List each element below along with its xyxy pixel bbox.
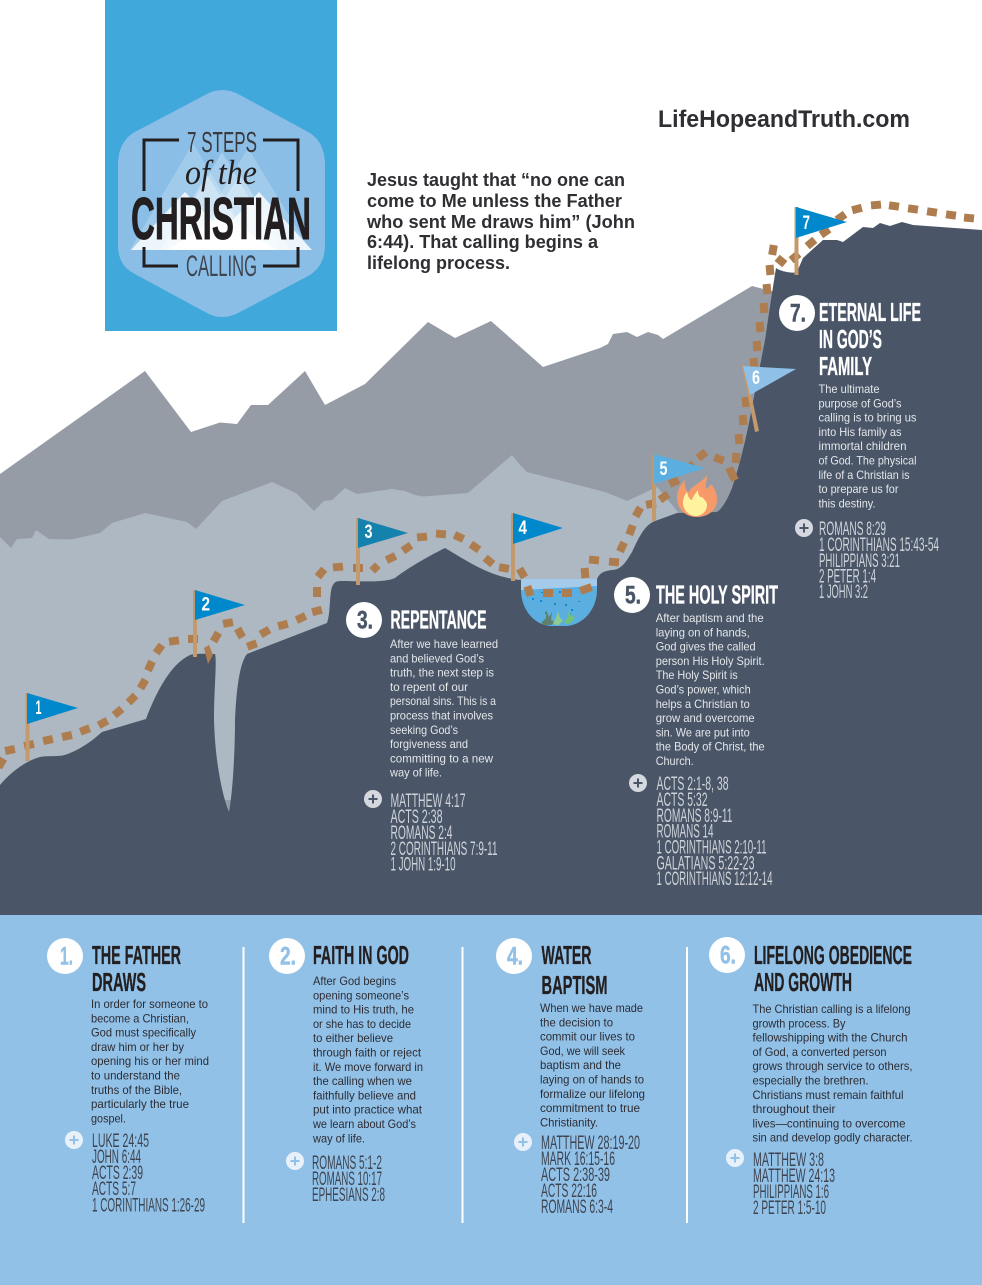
- scripture references: [541, 1133, 640, 1218]
- scripture references: ACTS 22:16: [541, 1181, 597, 1202]
- step 1: the father draws: [47, 938, 209, 1216]
- scripture references: 1 CORINTHIANS 1:26-29: [92, 1196, 205, 1216]
- scripture references: MATTHEW 4:17: [390, 791, 466, 812]
- number badge 6: 6.: [720, 942, 736, 970]
- body text: to understand the: [91, 1070, 180, 1082]
- body text: it. We move forward in: [313, 1061, 423, 1074]
- scripture references: [312, 1153, 385, 1206]
- heading: [819, 299, 921, 381]
- heading: FAITH IN GOD: [313, 942, 409, 970]
- body text: to either believe: [313, 1032, 393, 1045]
- step 3: repentance: [346, 602, 498, 876]
- plus icon: [795, 519, 813, 537]
- flag 4: [511, 513, 563, 581]
- intro text: [366, 169, 635, 273]
- scripture references: ACTS 2:39: [92, 1163, 143, 1184]
- flag 3: [356, 518, 408, 585]
- logo mountains: [130, 143, 312, 250]
- scripture references: MARK 16:15-16: [541, 1149, 615, 1170]
- scripture references: 2 CORINTHIANS 7:9-11: [390, 839, 498, 860]
- scripture references: ROMANS 8:9-11: [656, 806, 732, 827]
- plus icon: [514, 1133, 532, 1151]
- body text: In order for someone to: [91, 998, 208, 1011]
- body text: fellowshipping with the Church: [752, 1032, 908, 1045]
- flag 1: [26, 693, 78, 761]
- body text: opening his or her mind: [91, 1055, 209, 1068]
- body text: draw him or her by: [91, 1041, 184, 1054]
- scripture references: GALATIANS 5:22-23: [656, 854, 754, 874]
- heading: [542, 942, 608, 1000]
- step 2: faith in god: [269, 938, 423, 1206]
- flag 6: [742, 365, 796, 432]
- body text: When we have made: [540, 1002, 643, 1015]
- body text: the calling when we: [313, 1075, 412, 1088]
- body text: way of life.: [389, 767, 442, 780]
- scripture references: ROMANS 6:3-4: [541, 1197, 613, 1218]
- dotted journey path: [0, 201, 974, 769]
- heading: THE HOLY SPIRIT: [656, 582, 778, 610]
- step 7: eternal life: [779, 295, 939, 603]
- body text: immortal children: [818, 440, 906, 453]
- flag 6: 6: [752, 368, 760, 389]
- scripture references: [390, 791, 498, 876]
- scripture references: ROMANS 14: [656, 822, 714, 842]
- body text: After baptism and the: [656, 612, 764, 625]
- body text: life of a Christian is: [818, 469, 910, 482]
- body text: God’s power, which: [656, 684, 751, 696]
- heading: [92, 942, 181, 997]
- number badge 6: [709, 937, 745, 973]
- number badge 5: 5.: [625, 582, 641, 610]
- scripture references: ACTS 5:7: [92, 1179, 136, 1200]
- body text: growth process. By: [752, 1017, 846, 1030]
- logo panel: [105, 0, 337, 331]
- body text: process that involves: [390, 710, 493, 722]
- body text: particularly the true: [91, 1098, 189, 1111]
- body text: especially the brethren.: [752, 1074, 868, 1088]
- body text: [752, 1003, 912, 1145]
- body text: laying on of hands,: [656, 626, 750, 639]
- intro text: who sent Me draws him” (John: [366, 211, 635, 232]
- body text: sin. We are put into: [656, 726, 750, 739]
- step 4: water baptism: [496, 938, 645, 1218]
- body text: calling is to bring us: [818, 412, 917, 425]
- body text: to repent of our: [390, 681, 468, 694]
- body text: truth, the next step is: [390, 667, 494, 680]
- body text: God must specifically: [91, 1027, 196, 1040]
- scripture references: [753, 1150, 835, 1219]
- body text: way of life.: [312, 1132, 365, 1145]
- scripture references: PHILIPPIANS 3:21: [819, 551, 900, 572]
- step 5: the holy spirit: [614, 577, 778, 890]
- heading: BAPTISM: [542, 972, 608, 1000]
- body text: throughout their: [752, 1103, 836, 1116]
- body text: opening someone’s: [313, 989, 409, 1002]
- logo title: CALLING: [186, 250, 257, 283]
- body text: The Christian calling is a lifelong: [752, 1003, 910, 1016]
- body text: into His family as: [818, 426, 902, 439]
- logo title: 7 STEPS: [187, 127, 257, 159]
- scripture references: 1 JOHN 1:9-10: [390, 854, 456, 876]
- intro text: lifelong process.: [367, 252, 510, 273]
- body text: and believed God’s: [390, 652, 484, 665]
- scripture references: ACTS 2:38: [390, 807, 442, 828]
- flag 4: 4: [518, 518, 527, 539]
- scripture references: [819, 519, 939, 603]
- scripture references: ROMANS 5:1-2: [312, 1153, 382, 1174]
- body text: lives—continuing to overcome: [752, 1117, 906, 1130]
- flag 1: 1: [36, 698, 42, 719]
- scripture references: [92, 1131, 205, 1216]
- heading: IN GOD’S: [819, 326, 882, 354]
- scripture references: MATTHEW 28:19-20: [541, 1133, 640, 1154]
- scripture references: [656, 774, 773, 890]
- scripture references: ROMANS 8:29: [819, 519, 886, 540]
- water basin: [521, 579, 597, 626]
- scripture references: PHILIPPIANS 1:6: [753, 1182, 829, 1203]
- body text: Church.: [656, 755, 694, 768]
- body text: through faith or reject: [313, 1046, 422, 1060]
- body text: commitment to true: [540, 1102, 640, 1115]
- number badge 4: 4.: [507, 942, 523, 970]
- body text: [656, 612, 765, 768]
- intro text: come to Me unless the Father: [367, 190, 622, 211]
- bottom panel: [0, 915, 982, 1285]
- body text: grows through service to others,: [752, 1060, 912, 1073]
- scripture references: LUKE 24:45: [92, 1131, 149, 1152]
- plus icon: [629, 774, 647, 792]
- number badge 7: 7.: [790, 300, 806, 328]
- plus icon: [286, 1152, 304, 1170]
- flag 7: 7: [802, 213, 810, 234]
- body text: faithfully believe and: [313, 1089, 416, 1102]
- body text: The ultimate: [818, 383, 880, 396]
- body text: this destiny.: [818, 497, 876, 510]
- body text: the Body of Christ, the: [656, 741, 765, 754]
- website address: LifeHopeandTruth.com: [658, 106, 910, 133]
- scripture references: JOHN 6:44: [92, 1147, 141, 1168]
- body text: [389, 638, 498, 780]
- flag 5: 5: [660, 459, 668, 480]
- number badge 1: [47, 938, 83, 974]
- back mountain range: [0, 286, 775, 915]
- body text: we learn about God’s: [312, 1118, 416, 1131]
- logo title: CHRISTIAN: [131, 186, 311, 252]
- body text: helps a Christian to: [656, 698, 750, 711]
- number badge 4: [496, 938, 532, 974]
- scripture references: 2 PETER 1:5-10: [753, 1198, 826, 1219]
- scripture references: MATTHEW 24:13: [753, 1166, 835, 1187]
- body text: After God begins: [313, 975, 396, 988]
- logo brackets: [144, 140, 298, 266]
- body text: forgiveness and: [390, 738, 468, 751]
- scripture references: 1 CORINTHIANS 12:12-14: [656, 869, 773, 890]
- heading: DRAWS: [92, 969, 146, 997]
- body text: The Holy Spirit is: [656, 669, 738, 682]
- flag 2: [193, 590, 245, 657]
- heading: WATER: [542, 942, 592, 970]
- logo title: [131, 127, 311, 283]
- heading: [754, 942, 912, 997]
- body text: formalize our lifelong: [540, 1088, 645, 1101]
- intro text: 6:44). That calling begins a: [367, 231, 599, 252]
- plus icon: [364, 790, 382, 808]
- plus icon: [726, 1149, 744, 1167]
- body text: of God. The physical: [818, 454, 916, 468]
- heading: FAMILY: [819, 353, 872, 381]
- scripture references: EPHESIANS 2:8: [312, 1185, 385, 1206]
- body text: grow and overcome: [656, 712, 755, 725]
- scripture references: 2 PETER 1:4: [819, 566, 876, 588]
- heading: THE FATHER: [92, 942, 181, 970]
- body text: [818, 383, 917, 510]
- body text: the decision to: [540, 1016, 613, 1029]
- flag 7: [794, 207, 847, 275]
- body text: to prepare us for: [818, 483, 899, 496]
- body text: become a Christian,: [91, 1012, 189, 1025]
- body text: put into practice what: [313, 1104, 423, 1117]
- body text: purpose of God’s: [818, 397, 902, 410]
- body text: God gives the called: [656, 641, 756, 654]
- plus icon: [65, 1131, 83, 1149]
- body text: committing to a new: [390, 752, 494, 765]
- body text: Christians must remain faithful: [752, 1089, 904, 1102]
- body text: [312, 975, 423, 1145]
- number badge 2: [269, 938, 305, 974]
- body text: laying on of hands to: [540, 1074, 644, 1086]
- flag 2: 2: [202, 594, 210, 616]
- logo hexagon: [118, 90, 325, 317]
- body text: truths of the Bible,: [91, 1084, 182, 1097]
- body text: personal sins. This is a: [390, 695, 496, 708]
- scripture references: MATTHEW 3:8: [753, 1150, 824, 1171]
- body text: Christianity.: [540, 1116, 598, 1129]
- scripture references: ACTS 5:32: [656, 790, 708, 811]
- body text: baptism and the: [540, 1059, 621, 1072]
- body text: sin and develop godly character.: [752, 1132, 912, 1145]
- logo title: of the: [185, 153, 257, 192]
- number badge 1: 1.: [60, 942, 73, 970]
- intro text: Jesus taught that “no one can: [367, 169, 625, 190]
- scripture references: 1 CORINTHIANS 2:10-11: [656, 838, 766, 858]
- flag 3: 3: [364, 522, 372, 543]
- scripture references: ACTS 2:38-39: [541, 1165, 610, 1186]
- body text: commit our lives to: [540, 1031, 635, 1044]
- scripture references: ROMANS 2:4: [390, 823, 453, 844]
- middle mountain range: [0, 455, 680, 800]
- body text: mind to His truth, he: [313, 1004, 414, 1017]
- number badge 5: [614, 577, 650, 613]
- body text: After we have learned: [390, 638, 498, 651]
- body text: gospel.: [91, 1112, 126, 1125]
- heading: AND GROWTH: [754, 969, 852, 997]
- number badge 3: [346, 602, 382, 638]
- body text: God, we will seek: [540, 1045, 625, 1058]
- body text: [91, 998, 209, 1125]
- scripture references: 1 JOHN 3:2: [819, 582, 868, 603]
- body text: person His Holy Spirit.: [656, 655, 765, 668]
- scripture references: ROMANS 10:17: [312, 1169, 382, 1190]
- step 6: lifelong obedience and growth: [709, 937, 912, 1219]
- number badge 3: 3.: [357, 606, 373, 634]
- body text: seeking God’s: [390, 724, 458, 737]
- flame: [677, 475, 717, 517]
- scripture references: ACTS 2:1-8, 38: [656, 774, 728, 795]
- heading: REPENTANCE: [390, 606, 486, 634]
- number badge 7: [779, 295, 815, 331]
- foreground dark mountain: [0, 222, 982, 915]
- body text: or she has to decide: [313, 1018, 411, 1031]
- number badge 2: 2.: [280, 942, 296, 970]
- body text: of God, a converted person: [752, 1046, 886, 1059]
- body text: [540, 1002, 645, 1129]
- flag 5: [652, 454, 705, 521]
